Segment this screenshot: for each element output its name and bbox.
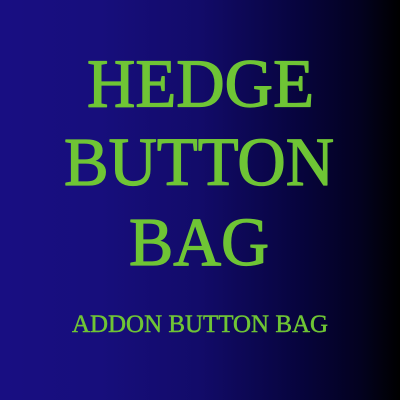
title: [64, 46, 334, 280]
title line: HEDGE: HEDGE: [87, 46, 314, 122]
subtitle: ADDON BUTTON BAG: [72, 311, 328, 338]
title line: BAG: BAG: [129, 204, 269, 280]
title line: BUTTON: BUTTON: [64, 124, 334, 200]
